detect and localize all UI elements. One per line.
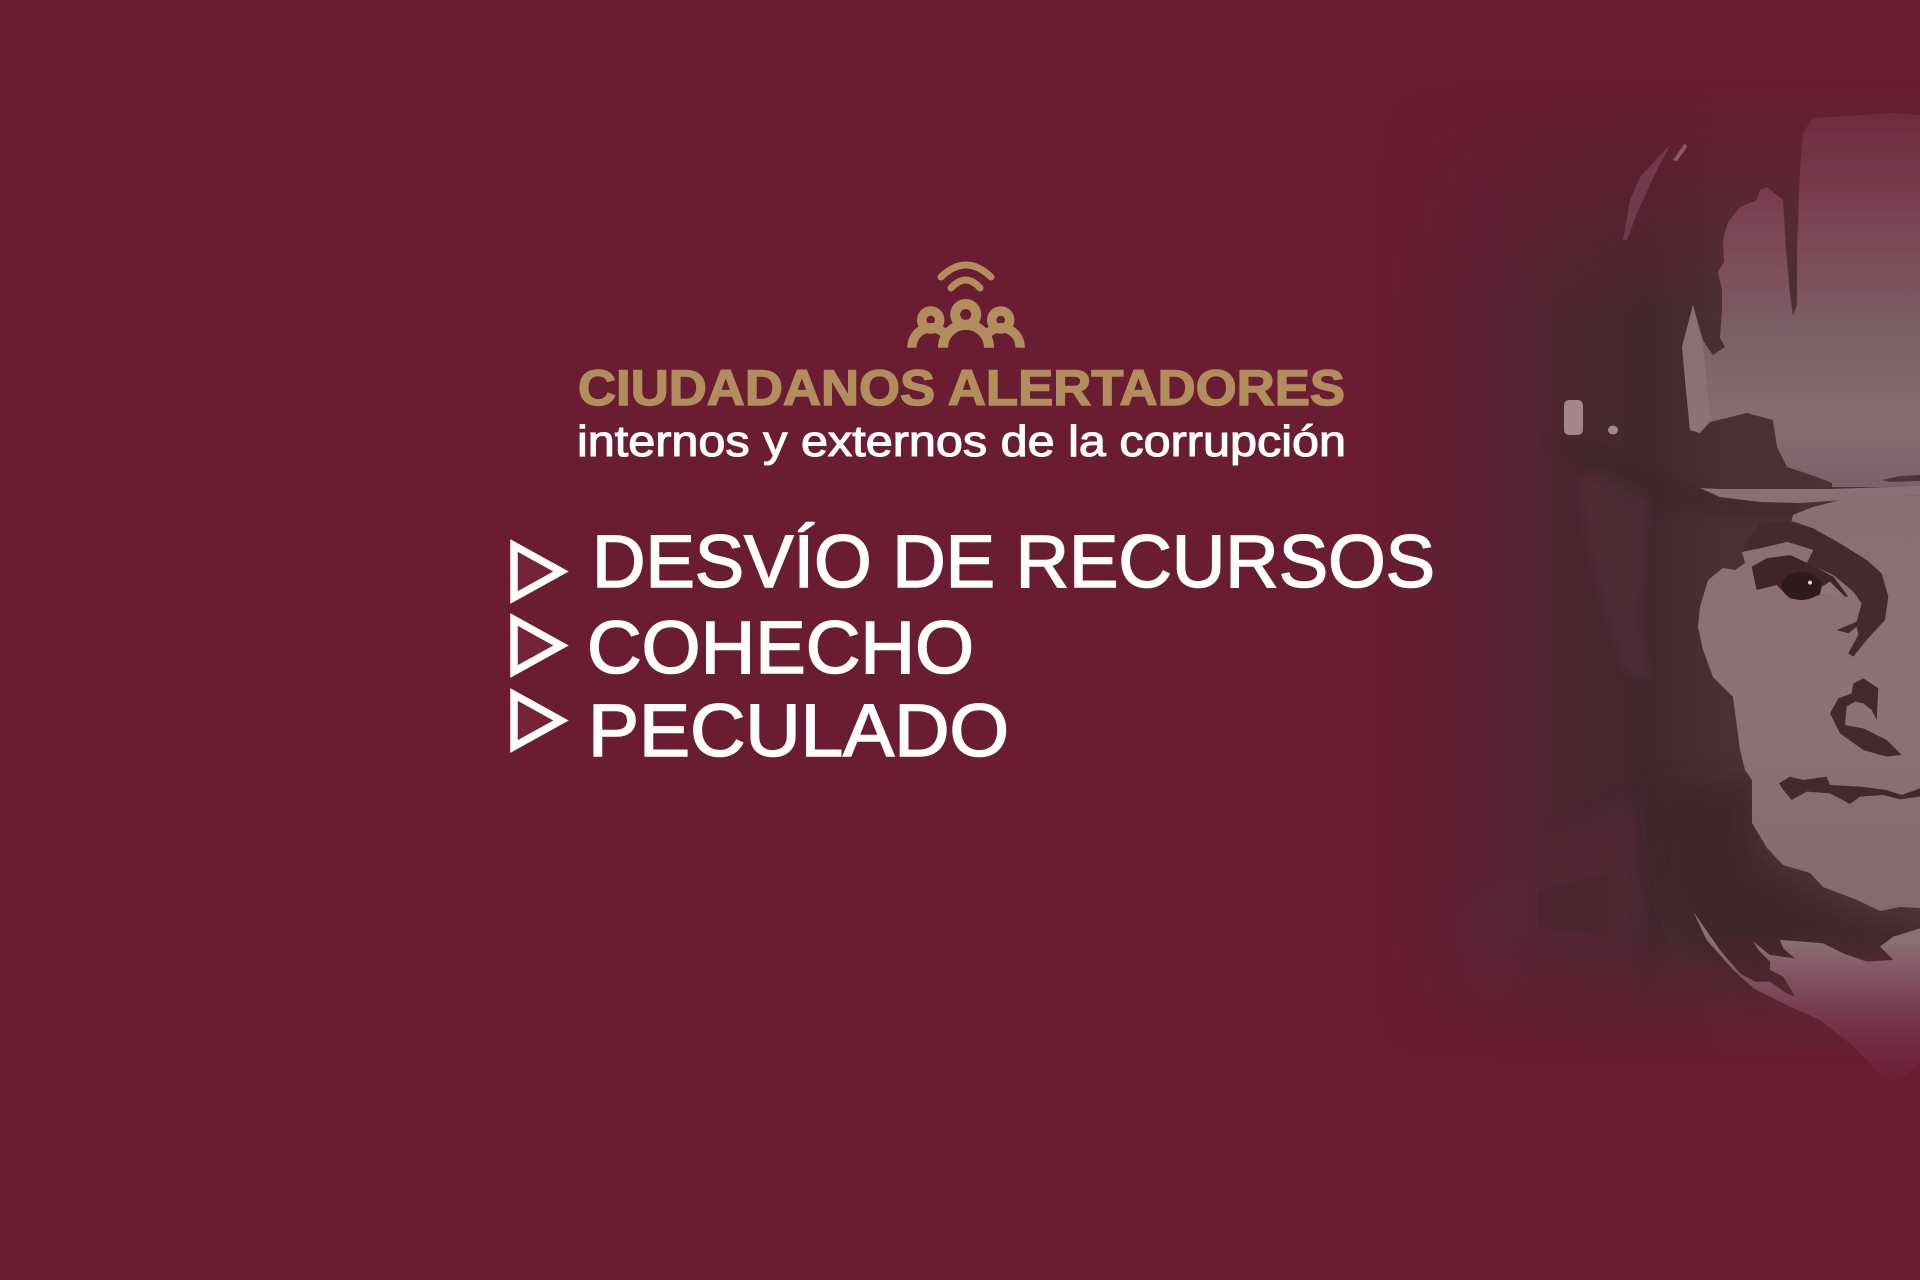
icon: citizens with signal xyxy=(912,265,1020,348)
helmet dark streak xyxy=(1882,475,1920,482)
list item: peculado xyxy=(514,689,1009,772)
arrow icon xyxy=(514,546,561,598)
helmet small rivet xyxy=(1608,426,1618,434)
brim highlight xyxy=(1700,486,1920,503)
neck shadow xyxy=(1650,780,1920,1000)
subtitle: internos y externos de la corrupción xyxy=(577,417,1346,466)
arrow icon xyxy=(514,694,561,746)
item label: PECULADO xyxy=(588,689,1009,772)
shirt shadow xyxy=(1538,873,1607,937)
helmet rivet xyxy=(1564,400,1583,435)
nostril xyxy=(1830,678,1902,757)
sclera xyxy=(1820,582,1845,597)
glint xyxy=(1808,581,1812,585)
portrait: worker with helmet xyxy=(1380,66,1920,1120)
eyebrow shadow xyxy=(1742,522,1888,657)
helmet small highlight xyxy=(1673,143,1687,161)
item label: DESVÍO DE RECURSOS xyxy=(592,520,1435,603)
list item: desvío de recursos xyxy=(514,520,1435,603)
right person xyxy=(987,311,1020,348)
arrow icon xyxy=(514,620,561,672)
ear xyxy=(1580,465,1650,680)
upper fade xyxy=(1380,80,1920,320)
helmet top highlight xyxy=(1623,145,1670,240)
eye xyxy=(1752,555,1848,600)
shoulder shape xyxy=(1450,800,1645,1010)
center person xyxy=(943,304,989,348)
signal outer arc xyxy=(941,265,991,277)
base fade xyxy=(1380,1060,1920,1120)
list item: cohecho xyxy=(514,606,974,689)
lower fade xyxy=(1380,930,1920,1060)
item label: COHECHO xyxy=(587,606,974,689)
left person xyxy=(912,311,945,348)
mouth xyxy=(1779,777,1920,804)
title: CIUDADANOS ALERTADORES xyxy=(578,360,1345,416)
soft shadow behind portrait xyxy=(1380,70,1920,1110)
neck light area xyxy=(1693,912,1920,1088)
face light area xyxy=(1698,495,1920,911)
helmet light area xyxy=(1682,113,1920,487)
iris xyxy=(1782,572,1822,600)
helmet side reflection xyxy=(1682,305,1710,433)
eye and nose details xyxy=(1742,522,1920,804)
signal inner arc xyxy=(951,280,980,288)
brim shadow xyxy=(1545,440,1800,520)
top fade xyxy=(1380,66,1920,80)
